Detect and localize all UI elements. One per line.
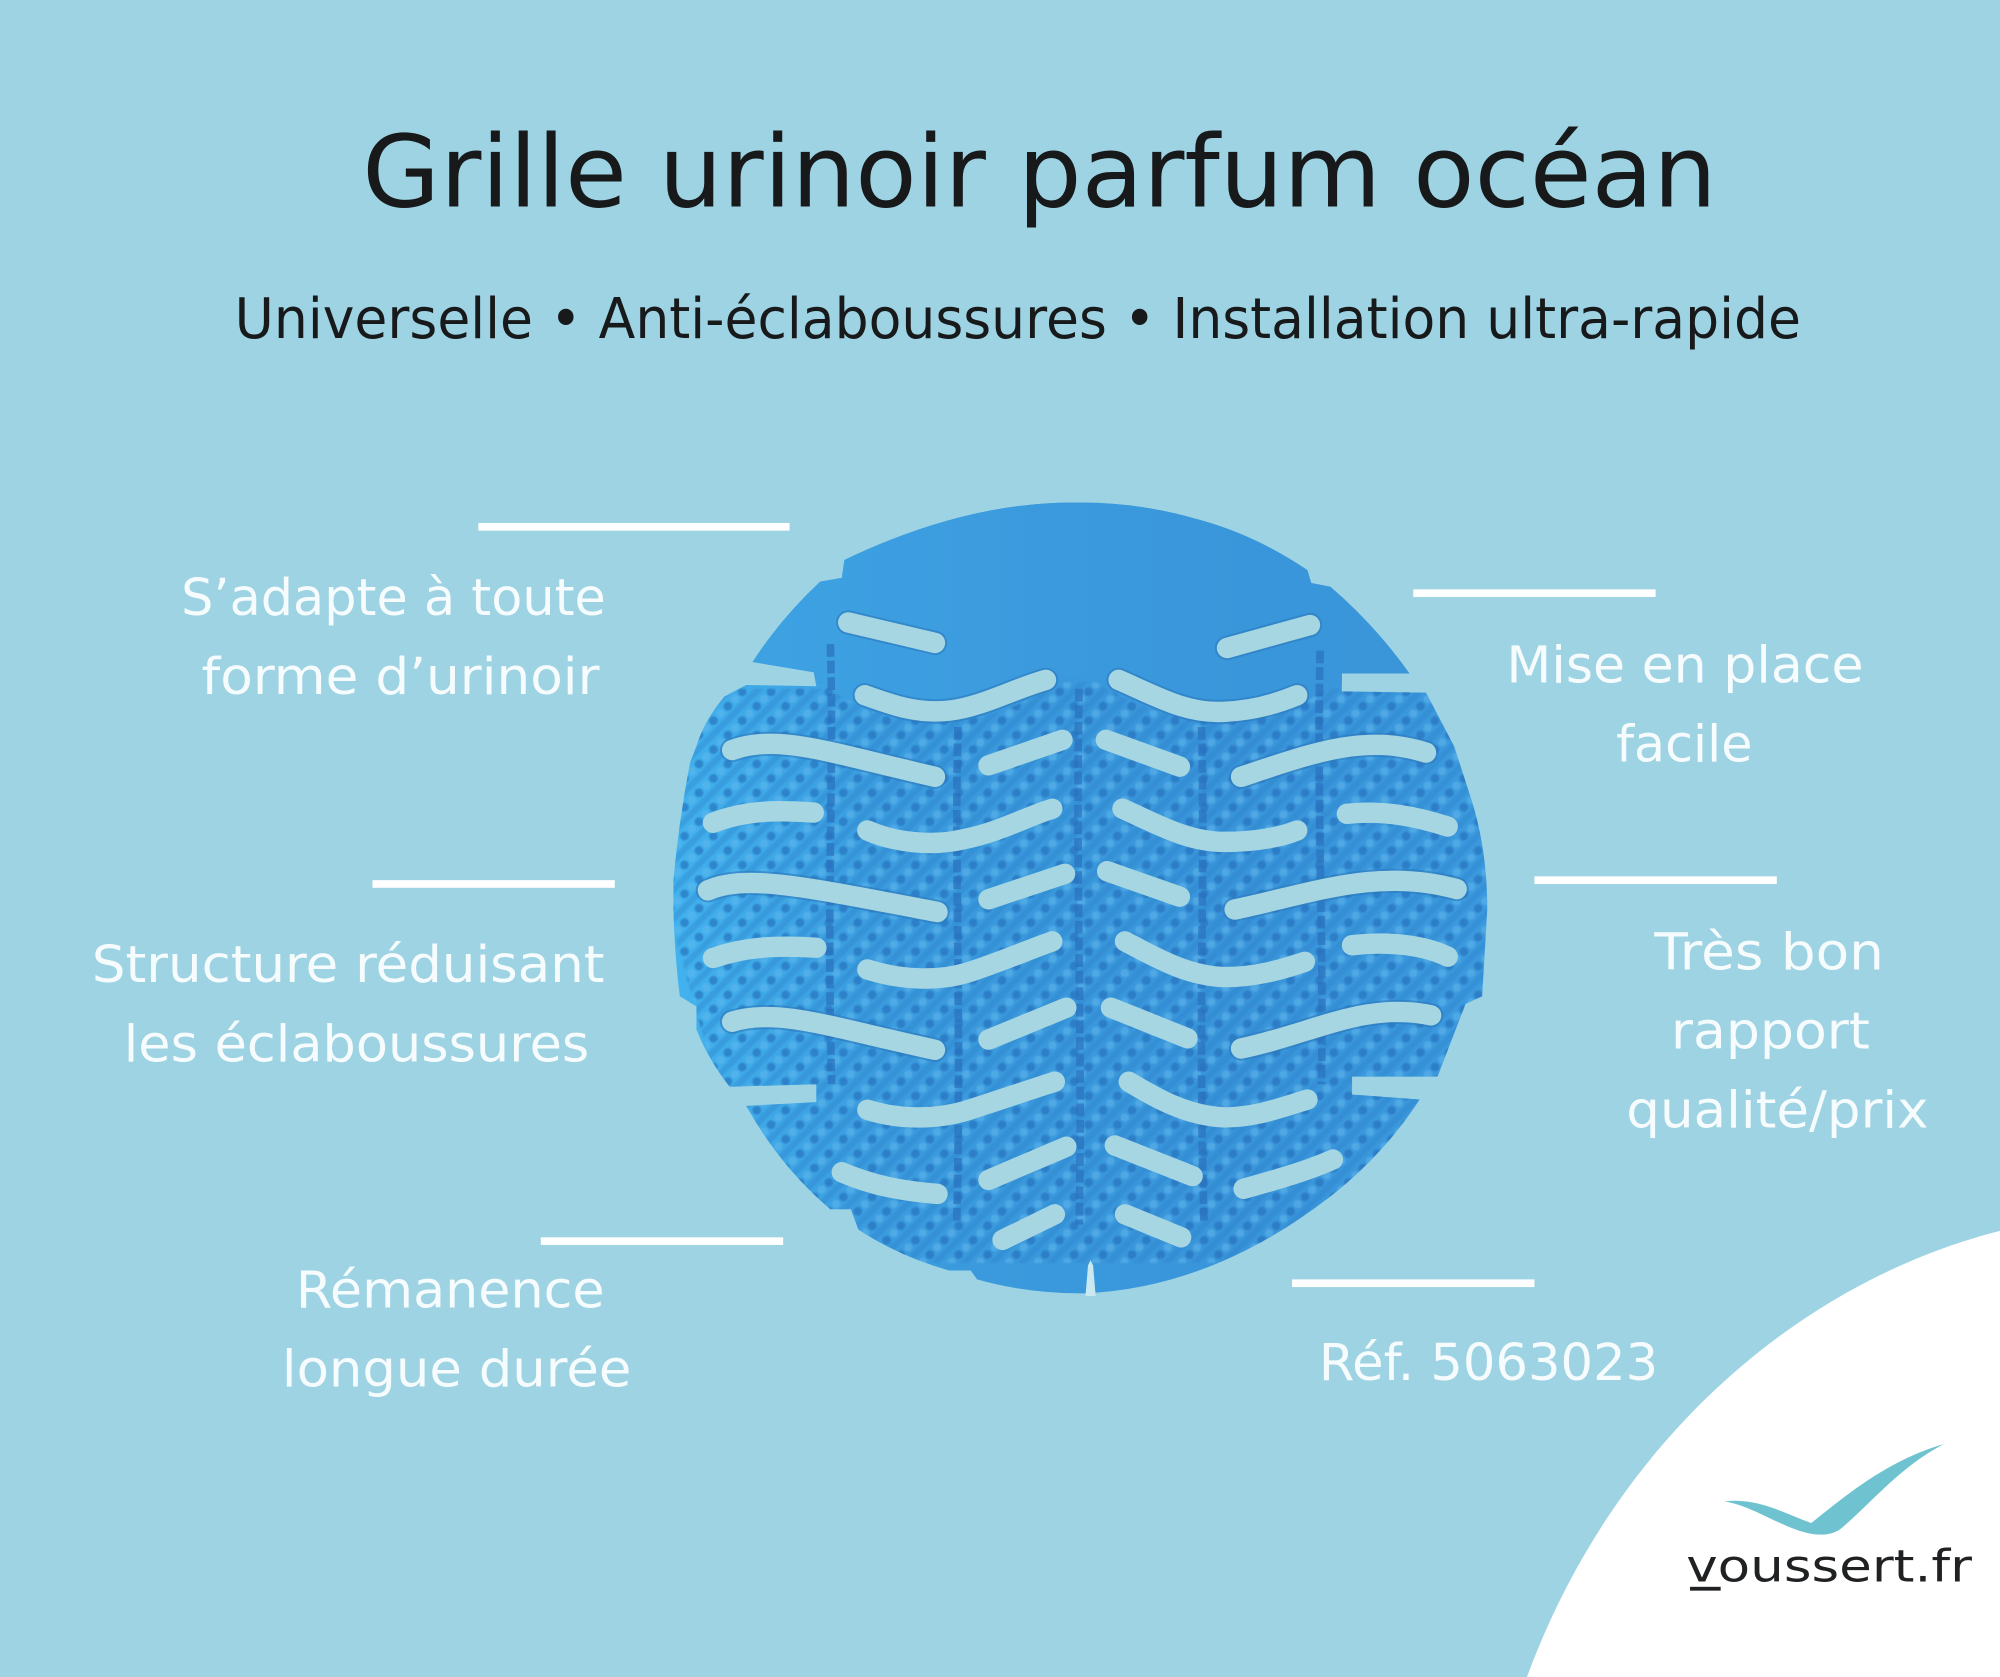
callout: easy installation [1413,589,1864,775]
callout: easy installation: facile [1616,716,1753,775]
logo wordmark: voussert.fr [1686,1541,1973,1593]
callout: long-lasting fragrance [282,1237,783,1400]
bottom notch [1085,1260,1096,1296]
smooth top dome [752,502,1410,684]
callout: adapts to any urinal [181,523,790,707]
disc body [673,502,1487,1293]
drainage slots [708,622,1457,1240]
callout: easy installation: Mise en place [1506,636,1864,695]
callout: good value: rapport [1671,1003,1870,1062]
callout: adapts to any urinal: forme d’urinoir [202,648,600,707]
icon: check-mark bird [1724,1444,1944,1535]
callout: adapts to any urinal: S’adapte à toute [181,569,606,628]
callout: long-lasting fragrance: longue durée [282,1341,631,1400]
callout: splash-reducing structure: les éclaboussures [124,1015,589,1074]
callout: splash-reducing structure [92,880,615,1074]
callout: product reference: Réf. 5063023 [1319,1334,1658,1393]
callout: good value: qualité/prix [1626,1082,1929,1141]
callout: splash-reducing structure: Structure réduisant [92,936,605,995]
disc texture [663,485,1505,1263]
title: Grille urinoir parfum océan [362,116,1717,231]
logo underline [1690,1587,1721,1591]
callout: good value [1534,876,1929,1141]
logo: voussert.fr [1686,1444,1973,1593]
callout: good value: Très bon [1653,923,1884,982]
subtitle: Universelle • Anti-éclaboussures • Installation ultra-rapide [235,287,1801,352]
callout: product reference [1292,1279,1658,1393]
slot shadows [708,622,1457,1050]
vertical ribs [830,644,1322,1225]
product image: round blue urinal screen [663,485,1505,1296]
white corner shape [1527,1231,2000,1677]
callout: long-lasting fragrance: Rémanence [296,1261,605,1320]
